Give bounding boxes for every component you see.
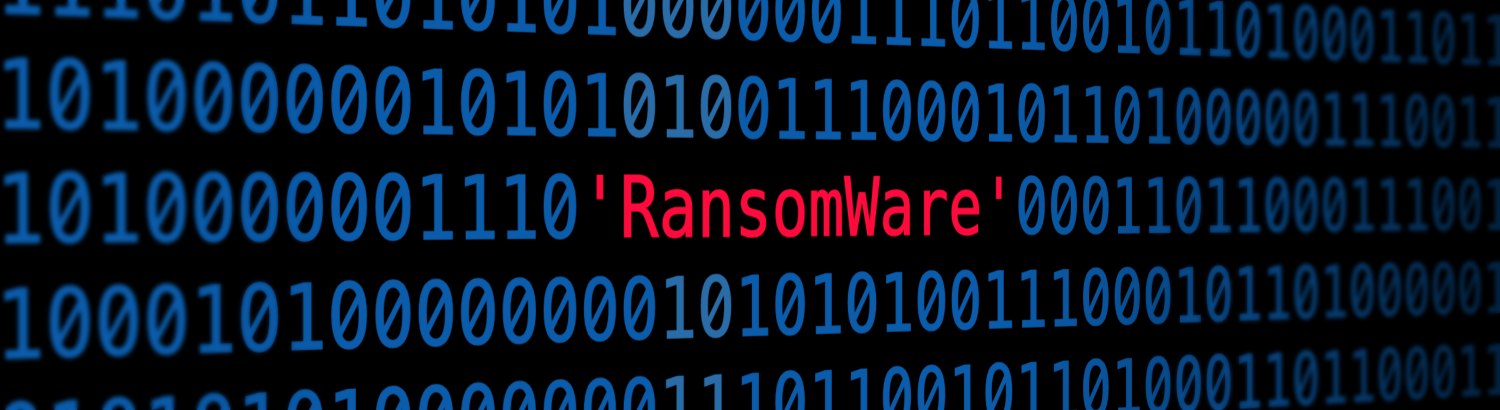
binary row 4: 0 xyxy=(697,260,735,357)
row 3 with highlighted RansomWare word: 0 xyxy=(371,157,414,261)
binary row 4: 0 xyxy=(327,265,371,370)
binary row 2: 0 xyxy=(282,48,327,154)
binary row 2: 0 xyxy=(1174,74,1204,161)
right focus blur xyxy=(1120,0,1500,410)
binary row 4: 0 xyxy=(1292,251,1320,336)
binary row 2: 0 xyxy=(914,66,948,159)
binary row 2: 0 xyxy=(1015,70,1048,160)
binary row 2: 0 xyxy=(697,60,735,157)
right edge fade to dark xyxy=(1000,0,1500,410)
row 3 with highlighted RansomWare word: 0 xyxy=(1015,162,1048,252)
binary row 2: 0 xyxy=(1430,82,1457,164)
binary row 4: 0 xyxy=(1430,249,1457,331)
binary row 2: 0 xyxy=(1403,81,1430,163)
row 3 with highlighted RansomWare word: 0 xyxy=(45,154,94,265)
binary row 2: 0 xyxy=(735,61,772,158)
row 3 with highlighted RansomWare word: 0 xyxy=(282,156,327,262)
binary row 4: 0 xyxy=(1376,250,1403,333)
binary row 2: 0 xyxy=(880,65,914,159)
binary row 4: 1 1 1 1 1 1 1 111 1 11 1 1 xyxy=(0,249,1500,382)
binary row 4: 0 xyxy=(414,263,457,367)
binary row 4: 0 xyxy=(94,268,143,378)
binary row 4: 0 xyxy=(772,259,808,354)
binary row 4: 0 xyxy=(914,257,948,349)
binary row 4: 0 xyxy=(45,269,94,380)
binary row 2: 0 xyxy=(327,49,371,154)
binary row 2: 0 xyxy=(620,58,659,157)
binary row 4: 0 xyxy=(1403,250,1430,332)
binary row 4: 0 xyxy=(371,264,414,369)
row 3 with highlighted RansomWare word: 0 xyxy=(1430,165,1457,247)
binary row 2: 0 xyxy=(1263,77,1292,162)
binary row 4: 0 xyxy=(1348,251,1376,334)
row 3 with highlighted RansomWare word: 0 xyxy=(1263,164,1292,249)
row 3 with highlighted RansomWare word: 0 xyxy=(237,156,282,263)
binary row 4: 0 xyxy=(1080,254,1112,344)
binary row 2: 0 xyxy=(1234,76,1263,162)
row 3 with highlighted RansomWare word: 0 xyxy=(1292,164,1320,249)
binary row 4: 0 xyxy=(1143,253,1174,341)
binary row 2: 0 xyxy=(1112,72,1143,161)
binary row 2: 0 xyxy=(371,50,414,155)
binary row 2: 0 xyxy=(143,43,190,153)
binary row 2: 0 xyxy=(457,53,499,155)
row 3 with highlighted RansomWare word: 0 xyxy=(327,157,371,262)
binary row 4: 0 xyxy=(1457,249,1483,330)
binary row 2: 0 xyxy=(948,68,982,159)
row 3 with highlighted RansomWare word: 0 xyxy=(143,155,190,264)
binary row 2: 0 xyxy=(45,41,94,152)
binary row 2: 1 1 1 1 1 1 111 1 11 1 111 11 xyxy=(0,39,1500,164)
row 3 with highlighted RansomWare word: 0 xyxy=(540,158,580,259)
binary row 4: 0 xyxy=(844,258,880,352)
binary row 2: 0 xyxy=(190,45,237,153)
binary row 4: 0 xyxy=(457,263,499,366)
row 3 with highlighted RansomWare word: 0 xyxy=(190,156,237,263)
binary row 4: 0 xyxy=(580,261,620,361)
binary row 4: 0 xyxy=(948,256,982,348)
binary row 2: 0 xyxy=(237,46,282,153)
row 3 with highlighted RansomWare word: 0 xyxy=(1080,163,1112,252)
left focus blur xyxy=(0,0,340,410)
row 3 with highlighted RansomWare word: 0 xyxy=(1320,165,1348,248)
binary row 1: 0 xyxy=(1430,0,1457,81)
binary row 4: 0 xyxy=(1112,254,1143,342)
binary row 2: 0 xyxy=(1292,78,1320,162)
row 3 with highlighted RansomWare word: 0 xyxy=(1174,163,1204,250)
binary row 4: 0 xyxy=(143,267,190,377)
binary row 4: 0 xyxy=(540,262,580,363)
row 3 with highlighted RansomWare word: 0 xyxy=(1457,166,1483,247)
binary row 4: 0 xyxy=(237,266,282,373)
binary row 4: 0 xyxy=(620,261,659,360)
row 3 with highlighted RansomWare word: 0 xyxy=(1048,162,1080,252)
binary row 4: 0 xyxy=(499,262,540,364)
binary row 2: 0 xyxy=(1204,75,1234,162)
binary row 2: 0 xyxy=(540,55,580,156)
row 3 with highlighted RansomWare word: 1 1 111 'RansomWare' 11 11 111 1 xyxy=(0,154,1500,266)
binary row 4: 0 xyxy=(1204,253,1234,339)
